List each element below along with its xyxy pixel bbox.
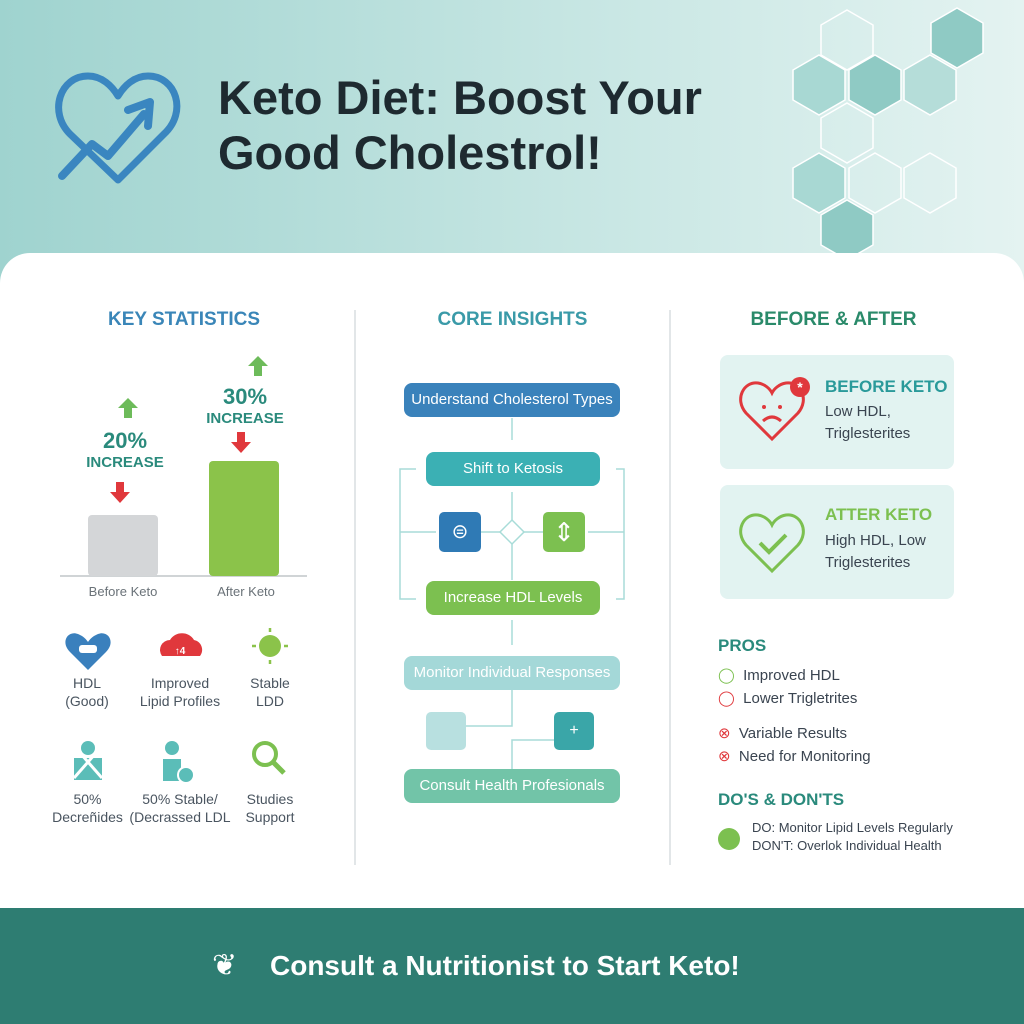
bar chart: Before Keto: [89, 584, 157, 599]
step 3: Increase HDL Levels: [444, 589, 582, 606]
panel: key statistics: 50%: [73, 791, 102, 807]
card: before keto: Triglesterites: [825, 425, 910, 442]
bar chart: After Keto: [217, 584, 275, 599]
pros list: ⊗ Variable Results: [718, 725, 847, 742]
title: [218, 71, 702, 179]
icon labels: HDL: [73, 675, 101, 691]
pros list: ◯ Improved HDL: [718, 667, 840, 684]
card: after keto: ATTER KETO: [825, 505, 932, 524]
bar chart: [60, 356, 307, 599]
icon labels: (Good): [65, 693, 109, 709]
icon labels: [65, 675, 109, 709]
icon grid: ↑4: [175, 646, 186, 657]
card: after keto: High HDL, Low: [825, 532, 926, 549]
main white panel: [0, 253, 1024, 923]
icon: updown: [543, 512, 585, 552]
icon: medkit: +: [569, 722, 579, 739]
step 5: [404, 769, 620, 803]
footer text: Consult a Nutritionist to Start Keto!: [270, 950, 740, 981]
hexagon decoration: [792, 7, 984, 253]
icon: medkit: [554, 712, 594, 750]
icon: updown: ⇕: [553, 517, 575, 547]
icon: flame: [439, 512, 481, 552]
panel: key statistics: [52, 309, 307, 825]
icon: leaf: ❦: [212, 949, 237, 982]
dos & donts: [718, 790, 953, 853]
card: after keto: [720, 485, 954, 599]
step 4: Monitor Individual Responses: [414, 664, 610, 681]
step 2: Shift to Ketosis: [463, 460, 563, 477]
icon: heart with arrow: [55, 72, 180, 184]
panel: key statistics: (Decrassed LDL: [129, 809, 231, 825]
step 5: Consult Health Profesionals: [419, 777, 605, 794]
heading: core insights: CORE INSIGHTS: [438, 309, 587, 330]
panel: before & after: [718, 309, 954, 853]
pros list: [718, 636, 871, 765]
dos & donts: DO: Monitor Lipid Levels Regularly: [752, 820, 953, 835]
dos & donts: DON'T: Overlok Individual Health: [752, 838, 942, 853]
bar chart: INCREASE: [206, 410, 284, 427]
panel: key statistics: Improved: [151, 675, 209, 691]
panel: core insights: [399, 309, 625, 803]
step 1: [404, 383, 620, 417]
heading: before & after: BEFORE & AFTER: [750, 309, 917, 330]
panel: key statistics: Decreñides: [52, 809, 123, 825]
panel: key statistics: Studies: [247, 791, 293, 807]
pros list: PROS: [718, 636, 766, 655]
footer banner: [0, 908, 1024, 1024]
panel: key statistics: LDD: [256, 693, 284, 709]
panel: key statistics: Stable: [250, 675, 290, 691]
step 2: [426, 452, 600, 486]
icon grid: [65, 628, 288, 782]
bar chart: 20%: [103, 428, 147, 453]
bar chart: INCREASE: [86, 454, 164, 471]
step 4: [404, 656, 620, 690]
pros list: ◯ Lower Trigletrites: [718, 690, 857, 707]
icon: gauge: [426, 712, 466, 750]
panel: key statistics: Support: [245, 809, 295, 825]
step 3: [426, 581, 600, 615]
title: Keto Diet: Boost Your: [218, 71, 702, 124]
dos & donts: DO'S & DON'TS: [718, 790, 844, 809]
card: before keto: *: [797, 379, 803, 395]
card: before keto: Low HDL,: [825, 403, 891, 420]
card: before keto: BEFORE KETO: [825, 377, 947, 396]
card: after keto: Triglesterites: [825, 554, 910, 571]
bar chart: 30%: [223, 384, 267, 409]
title: Good Cholestrol!: [218, 126, 602, 179]
card: before keto: [720, 355, 954, 469]
pros list: ⊗ Need for Monitoring: [718, 748, 871, 765]
step 1: Understand Cholesterol Types: [411, 391, 613, 408]
heading: key statistics: KEY STATISTICS: [108, 309, 260, 330]
flow connectors: [399, 418, 625, 769]
panel: key statistics: Lipid Profiles: [140, 693, 220, 709]
panel: key statistics: 50% Stable/: [142, 791, 218, 807]
icon: flame: ⊜: [452, 521, 468, 543]
